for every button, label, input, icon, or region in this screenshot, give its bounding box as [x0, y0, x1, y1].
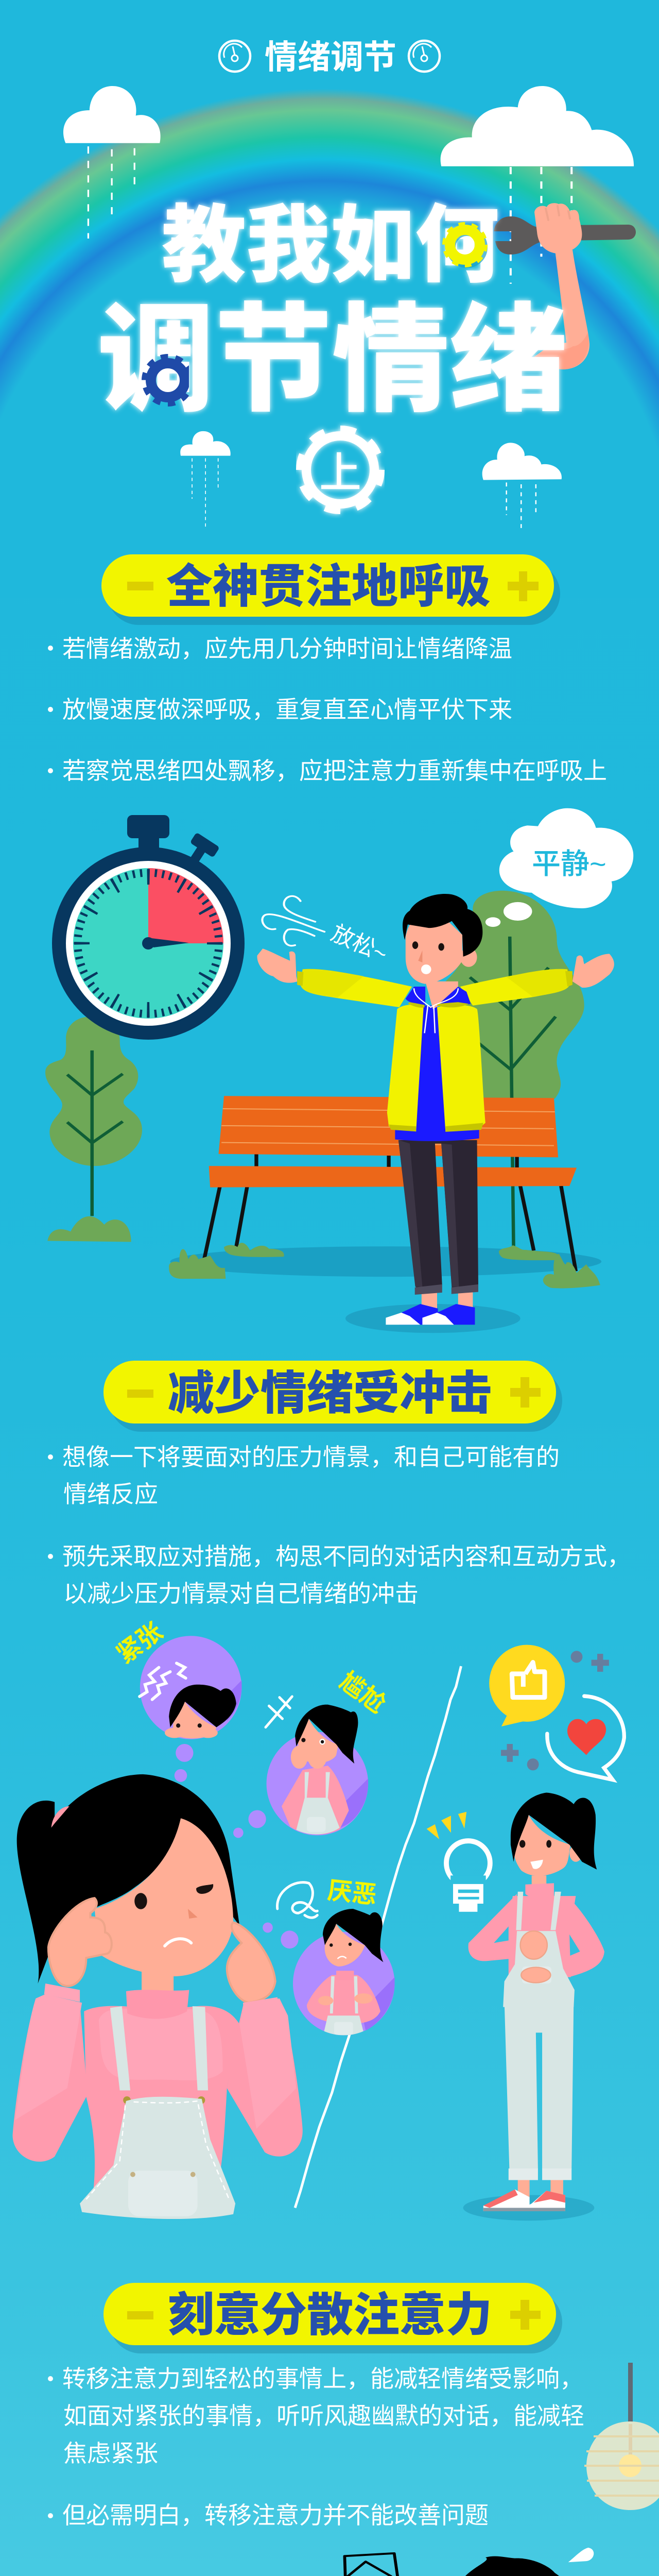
- hands: [257, 948, 614, 988]
- text block: section 3 bullets: 焦虑紧张: [63, 2440, 158, 2467]
- heading: section 1: 全神贯注地呼吸: [166, 561, 491, 613]
- thought bubble: 平静~: [532, 848, 606, 880]
- text block: section 3 bullets: 但必需明白，转移注意力并不能改善问题: [62, 2502, 489, 2529]
- scene: park background: [45, 891, 601, 1333]
- rainbow arc: [0, 82, 659, 598]
- bench: [204, 1096, 577, 1271]
- label: 紧张: 紧张: [112, 1618, 168, 1669]
- text block: section 2 bullets: [48, 1444, 631, 1607]
- lamp: [584, 2363, 659, 2510]
- heading: section 1: [101, 554, 560, 625]
- thought bubble: [485, 808, 633, 927]
- top label: [219, 39, 440, 76]
- stopwatch: [52, 815, 245, 1040]
- legs: [398, 1140, 478, 1311]
- heading: section 3: 刻意分散注意力: [168, 2290, 492, 2341]
- icon: lightbulb: [427, 1812, 490, 1912]
- tree: left: [45, 1016, 142, 1242]
- icon: thumbs up bubble: [489, 1645, 565, 1726]
- head: [433, 2556, 596, 2576]
- thought dots: [175, 1744, 299, 1948]
- gear with 上: [300, 430, 380, 510]
- icon: gauge left: [219, 41, 250, 72]
- text block: section 1 bullets: 若察觉思绪四处飘移，应把注意力重新集中在呼吸上: [62, 757, 607, 784]
- title line 2: 调节情绪: [97, 295, 567, 426]
- divider line: [295, 1666, 461, 2208]
- emotion scribbles: [266, 1697, 317, 1918]
- text block: section 2 bullets: 预先采取应对措施，构思不同的对话内容和互动方式，: [62, 1543, 631, 1570]
- thinking boy with sweat drops: [334, 2548, 637, 2576]
- icon: heart bubble: [547, 1696, 624, 1780]
- text block: section 3 bullets: [48, 2365, 584, 2529]
- label: 厌恶: 厌恶: [326, 1877, 378, 1909]
- decorative dots: [501, 1651, 609, 1770]
- wrench: [494, 216, 636, 255]
- icon: breath wind: [262, 896, 324, 946]
- text: 放松: 放松~: [327, 920, 391, 967]
- head: [403, 894, 482, 984]
- scribble: [334, 2553, 422, 2576]
- text block: section 1 bullets: 放慢速度做深呼吸，重复直至心情平伏下来: [62, 696, 512, 723]
- text block: section 2 bullets: 情绪反应: [63, 1481, 158, 1507]
- heading: section 2: [103, 1361, 562, 1432]
- gear: blue: [145, 357, 191, 403]
- man relaxing with arms open: [257, 894, 614, 1325]
- forearm and elbow: [534, 250, 589, 369]
- big girl: [12, 1774, 303, 2219]
- bushes: [169, 1243, 600, 1289]
- gear: yellow: [445, 225, 485, 265]
- label text: 情绪调节: [265, 39, 396, 76]
- main title: [97, 198, 567, 426]
- clock hand: [151, 938, 189, 947]
- title line 1: 教我如何: [162, 198, 499, 293]
- bubble: nervous: [140, 1636, 241, 1739]
- jacket and hoodie: [387, 1005, 485, 1141]
- arm holding wrench: [494, 203, 636, 369]
- heading: section 2: 减少情绪受冲击: [168, 1368, 492, 1419]
- ticks: [78, 873, 219, 1014]
- timer sector: [148, 868, 223, 943]
- neck and hood: [406, 981, 471, 1033]
- sweat drops: [568, 2548, 604, 2576]
- text block: section 1 bullets: 若情绪激动，应先用几分钟时间让情绪降温: [62, 635, 512, 662]
- text block: section 2 bullets: 想像一下将要面对的压力情景，和自己可能有的: [62, 1444, 560, 1470]
- fist: [534, 203, 582, 253]
- text block: section 1 bullets: [48, 635, 607, 784]
- text block: section 2 bullets: 以减少压力情景对自己情绪的冲击: [63, 1580, 419, 1607]
- text block: section 3 bullets: 如面对紧张的事情，听听风趣幽默的对话，能减轻: [63, 2402, 584, 2429]
- label: 尴尬: 尴尬: [335, 1668, 391, 1719]
- bubble: disgust: [293, 1909, 395, 2037]
- shoes: [386, 1304, 475, 1325]
- right girl: [463, 1792, 604, 2221]
- clouds and rain: [63, 86, 634, 530]
- icon: gauge right: [409, 41, 440, 72]
- gear with 上: 上: [319, 450, 361, 497]
- scene: girl imagining stress vs coping: [12, 1636, 624, 2221]
- arms: [297, 969, 573, 1007]
- heading: section 3: [103, 2283, 562, 2353]
- bubble: embarrassed: [267, 1705, 368, 1836]
- tree: right: [445, 891, 584, 1247]
- text block: section 3 bullets: 转移注意力到轻松的事情上，能减轻情绪受影响，: [62, 2365, 583, 2392]
